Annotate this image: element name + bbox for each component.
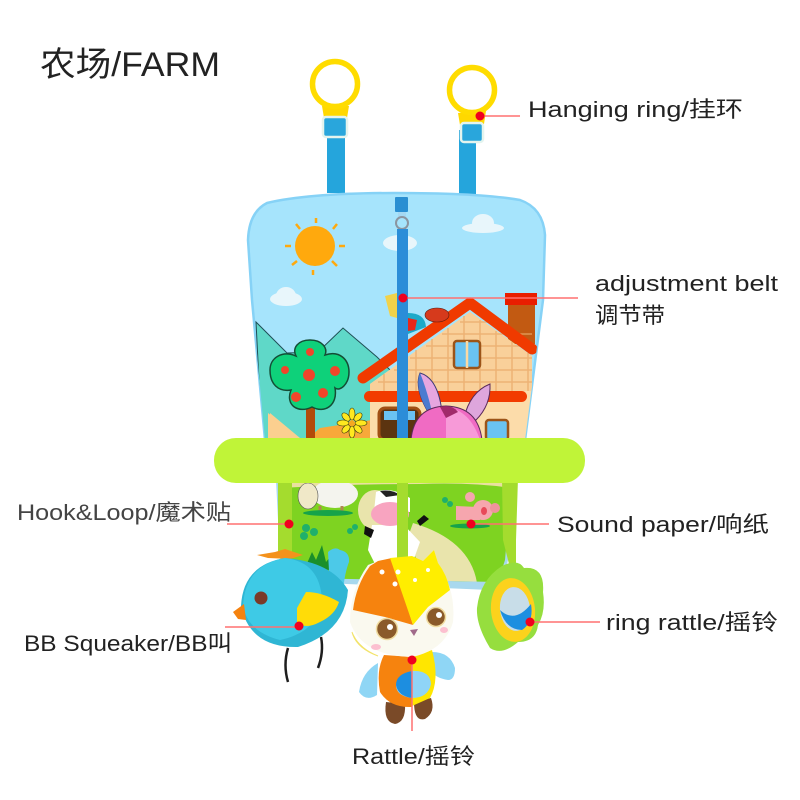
leader line: Hanging ring <box>476 112 520 120</box>
icon: blue bird plush <box>233 548 349 682</box>
icon: sun <box>285 218 345 275</box>
label: ring rattle: ring rattle/摇铃 <box>606 610 778 635</box>
icon: bird on roof <box>385 293 449 334</box>
label: adjustment belt <box>595 271 778 328</box>
leader line: ring rattle <box>526 618 600 626</box>
icon: sheep <box>298 480 358 516</box>
icon: clover <box>300 497 453 540</box>
adjustment belt strap <box>395 197 408 440</box>
panel: farm scene cloth <box>248 193 545 440</box>
leader line: adjustment belt <box>398 294 578 302</box>
icon: fox plush <box>350 550 455 724</box>
house <box>363 293 537 440</box>
icon: apple tree <box>270 340 349 440</box>
icon: yellow flower <box>337 408 367 438</box>
icon: right hanging ring and strap <box>450 68 494 196</box>
leader line: Hook and Loop <box>227 520 294 528</box>
icon: pig <box>450 492 500 528</box>
icon: clouds <box>270 214 504 306</box>
label: Hanging ring: Hanging ring/挂环 <box>528 97 743 122</box>
green padded bar <box>214 438 585 483</box>
straps under bar <box>278 478 518 568</box>
title: 农场/FARM <box>40 46 220 84</box>
label: Hook and Loop: Hook&Loop/魔术贴 <box>17 500 231 525</box>
icon: left hanging ring and strap <box>312 62 358 193</box>
icon: cow <box>364 490 429 570</box>
icon: bunny head <box>411 373 490 440</box>
mountains <box>256 322 390 440</box>
leader line: Rattle <box>408 656 416 731</box>
icon: ring rattle teether <box>477 562 544 651</box>
panel: lower farm cloth <box>276 480 516 590</box>
label: adjustment belt: adjustment belt <box>595 271 778 296</box>
leader line: Sound paper <box>466 520 549 528</box>
label: Rattle: Rattle/摇铃 <box>352 744 475 769</box>
label: Sound paper: Sound paper/响纸 <box>557 512 769 537</box>
label: adjustment belt: 调节带 <box>595 303 665 328</box>
leader line: BB Squeaker <box>225 622 304 630</box>
label: BB Squeaker: BB Squeaker/BB叫 <box>24 631 232 656</box>
icon: grass <box>308 545 329 570</box>
path <box>405 523 477 583</box>
